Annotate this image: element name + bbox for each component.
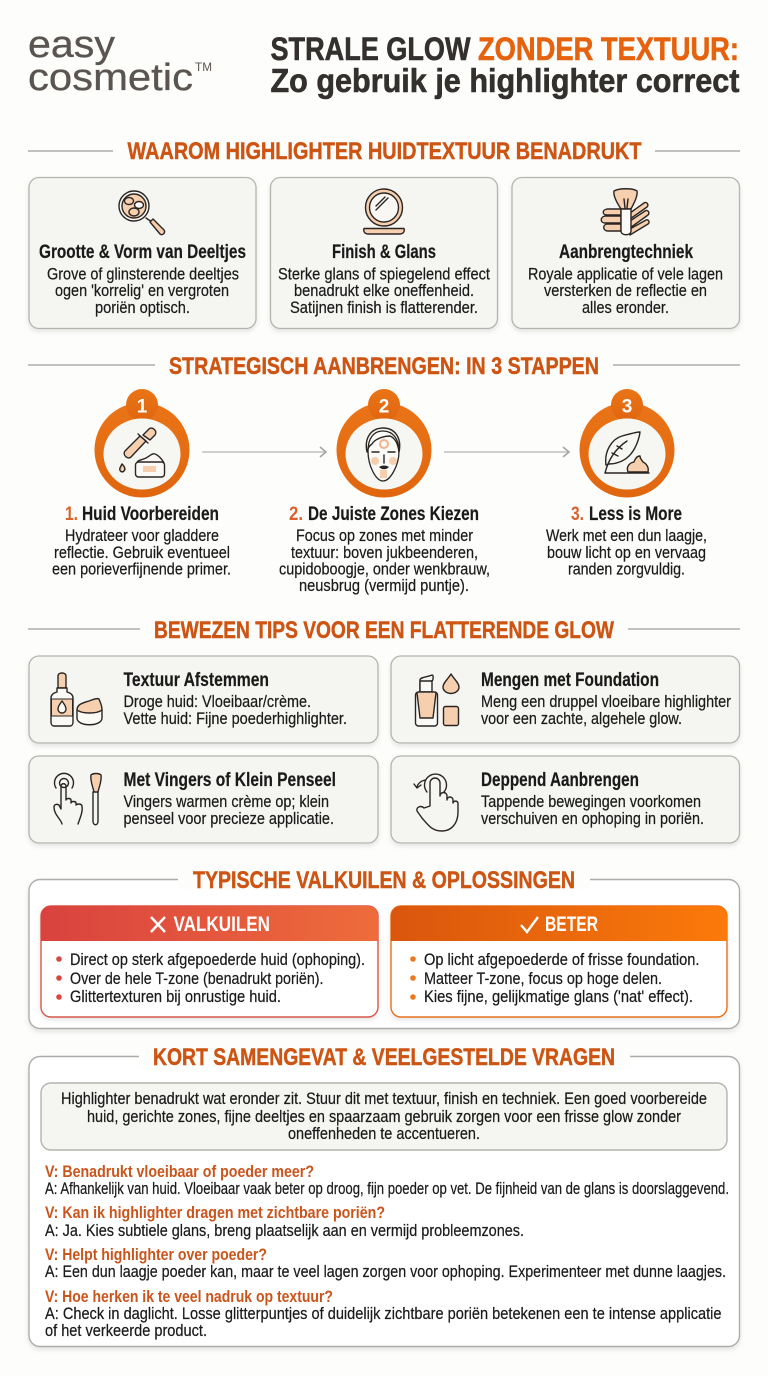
icon: step 3 ring and badge: 3 — [622, 396, 632, 418]
icon: serum bottle and jar — [51, 673, 102, 726]
heading: samenvatting: KORT SAMENGEVAT & VEELGESTELDE VRAGEN — [153, 1044, 615, 1071]
icon: feather and cream — [605, 432, 649, 473]
section heading: strategisch: STRATEGISCH AANBRENGEN: IN 3 STAPPEN — [169, 353, 599, 380]
panel: samenvatting en vragen — [29, 1044, 740, 1346]
step 3 text: 3. — [571, 504, 584, 525]
icon: hand with brush — [601, 189, 649, 235]
step 2 text: Focus op zones met minder — [296, 527, 473, 545]
panel: valkuilen en oplossingen — [29, 867, 740, 1028]
icon: tapping hand — [414, 774, 458, 831]
tip: mengen met foundation — [391, 656, 740, 743]
faq 2: A: Ja. Kies subtiele glans, breng plaatselijk aan en vermijd probleemzones. — [45, 1222, 524, 1240]
tip: deppend aanbrengen: verschuiven en ophoping in poriën. — [481, 810, 704, 828]
faq 1: V: Benadrukt vloeibaar of poeder meer? — [45, 1163, 314, 1181]
summary box: huid, gerichte zones, fijne deeltjes en spaarzaam gebruik zorgen voor een frisse glow zonder — [87, 1108, 681, 1126]
tip: deppend aanbrengen — [391, 756, 740, 843]
step 3 — [546, 389, 707, 578]
panel: grootte en vorm: Grove of glinsterende deeltjes — [47, 266, 239, 284]
column: valkuilen — [41, 906, 378, 1017]
step 1 text — [52, 504, 231, 578]
column: valkuilen: Over de hele T-zone (benadrukt poriën). — [70, 970, 324, 988]
icon: foundation bottle, drop and swatch — [416, 674, 459, 726]
step 1 text: 1. — [65, 504, 78, 525]
faq 2: V: Kan ik highlighter dragen met zichtbare poriën? — [45, 1204, 385, 1222]
faq 4: V: Hoe herken ik te veel nadruk op textuur? — [45, 1288, 333, 1306]
tip: textuur afstemmen — [29, 656, 378, 743]
faq 4 — [45, 1288, 722, 1340]
step 2 text: 2. — [289, 504, 303, 525]
icon: dropper and jar — [120, 428, 164, 477]
tip: textuur afstemmen: Vette huid: Fijne poederhighlighter. — [124, 710, 347, 728]
title: STRALE GLOW — [270, 31, 471, 67]
step 2 text: neusbrug (vermijd puntje). — [299, 577, 469, 595]
step 3 text: randen zorgvuldig. — [568, 560, 685, 578]
icon: step 3 ring and badge — [580, 389, 674, 498]
section heading: waarom: WAAROM HIGHLIGHTER HUIDTEXTUUR BENADRUKT — [128, 138, 642, 165]
step 3 text — [546, 504, 707, 578]
column: beter: Kies fijne, gelijkmatige glans ('nat' effect). — [424, 988, 693, 1006]
panel: finish en glans: Finish & Glans — [332, 242, 436, 263]
step 1 — [52, 389, 231, 578]
step 2 text — [279, 504, 490, 595]
panel: aanbrengtechniek: Aanbrengtechniek — [559, 242, 693, 263]
faq 3 — [45, 1246, 726, 1281]
faq 2 — [45, 1204, 524, 1240]
panel: grootte en vorm: Grootte & Vorm van Deeltjes — [39, 242, 246, 263]
icon: mirror — [364, 189, 404, 234]
section heading: tips: BEWEZEN TIPS VOOR EEN FLATTERENDE GLOW — [154, 617, 614, 644]
panel: aanbrengtechniek — [512, 178, 740, 328]
column: valkuilen: Direct op sterk afgepoederde huid (ophoping). — [70, 951, 365, 969]
icon: step 1 ring and badge — [94, 389, 190, 498]
faq 3: V: Helpt highlighter over poeder? — [45, 1246, 267, 1264]
panel: finish en glans: Sterke glans of spiegelend effect — [278, 266, 490, 284]
tip: mengen met foundation: voor een zachte, algehele glow. — [481, 710, 682, 728]
title: Zo gebruik je highlighter correct — [270, 62, 740, 99]
step 3 text: Werk met een dun laagje, — [546, 527, 707, 545]
tip: textuur afstemmen: Textuur Afstemmen — [124, 670, 269, 691]
step 3 text: Less is More — [589, 504, 682, 525]
arrow 1 — [202, 447, 326, 457]
logo: easy cosmetic: cosmetic — [28, 57, 193, 99]
tip: deppend aanbrengen: Tappende bewegingen voorkomen — [481, 793, 701, 811]
panel: finish en glans — [270, 178, 498, 328]
icon: step 1 ring and badge: 1 — [137, 396, 148, 418]
logo: easy cosmetic: easy — [28, 24, 115, 66]
column: beter: BETER — [545, 913, 598, 936]
step 1 text: Hydrateer voor gladdere — [65, 527, 219, 545]
column: valkuilen: VALKUILEN — [174, 913, 270, 936]
panel: grootte en vorm: ogen 'korrelig' en vergroten — [55, 282, 229, 300]
step 2 — [279, 389, 490, 595]
tip: met vingers of klein penseel: Met Vingers of Klein Penseel — [124, 770, 336, 791]
panel: grootte en vorm: poriën optisch. — [95, 299, 190, 317]
tip: met vingers of klein penseel — [29, 756, 378, 843]
tip: met vingers of klein penseel: penseel voor precieze applicatie. — [124, 810, 334, 828]
title — [270, 31, 740, 99]
icon: face zones — [366, 428, 400, 481]
panel: aanbrengtechniek: alles eronder. — [582, 299, 669, 317]
logo: easy cosmetic: TM — [195, 62, 212, 74]
icon: finger and brush — [54, 773, 101, 825]
summary box — [41, 1083, 727, 1150]
step 1 text: Huid Voorbereiden — [82, 504, 219, 525]
tip: met vingers of klein penseel: Vingers warmen crème op; klein — [124, 793, 329, 811]
icon: step 2 ring and badge: 2 — [379, 396, 389, 418]
column: beter — [391, 906, 727, 1017]
heading: valkuilen en oplossingen: TYPISCHE VALKUILEN & OPLOSSINGEN — [193, 867, 575, 894]
arrow 2 — [444, 447, 569, 457]
step 1 text: een porieverfijnende primer. — [52, 560, 231, 578]
column: valkuilen: Glittertexturen bij onrustige huid. — [70, 988, 281, 1006]
column: beter: Matteer T-zone, focus op hoge delen. — [424, 970, 662, 988]
step 2 text: textuur: boven jukbeenderen, — [291, 544, 478, 562]
panel: aanbrengtechniek: Royale applicatie of vele lagen — [528, 266, 723, 284]
panel: aanbrengtechniek: versterken de reflectie en — [544, 282, 707, 300]
panel: finish en glans: Satijnen finish is flatterender. — [290, 299, 478, 317]
logo: easy cosmetic — [28, 24, 212, 99]
tip: textuur afstemmen: Droge huid: Vloeibaar/crème. — [124, 693, 311, 711]
step 2 text: cupidoboogje, onder wenkbrauw, — [279, 560, 490, 578]
step 3 text: bouw licht op en vervaag — [547, 544, 706, 562]
column: beter: Op licht afgepoederde of frisse foundation. — [424, 951, 700, 969]
tip: mengen met foundation: Meng een druppel vloeibare highlighter — [481, 693, 731, 711]
icon: magnifier — [119, 191, 165, 235]
step 1 text: reflectie. Gebruik eventueel — [54, 544, 230, 562]
tip: mengen met foundation: Mengen met Foundation — [481, 670, 659, 691]
tip: deppend aanbrengen: Deppend Aanbrengen — [481, 770, 639, 791]
faq 1 — [45, 1163, 729, 1198]
faq 4: of het verkeerde product. — [45, 1322, 207, 1340]
step 2 text: De Juiste Zones Kiezen — [308, 504, 479, 525]
icon: step 2 ring and badge — [336, 389, 432, 498]
panel: grootte en vorm — [29, 178, 256, 328]
summary box: oneffenheden te accentueren. — [288, 1125, 480, 1143]
panel: finish en glans: benadrukt elke oneffenheid. — [294, 282, 474, 300]
